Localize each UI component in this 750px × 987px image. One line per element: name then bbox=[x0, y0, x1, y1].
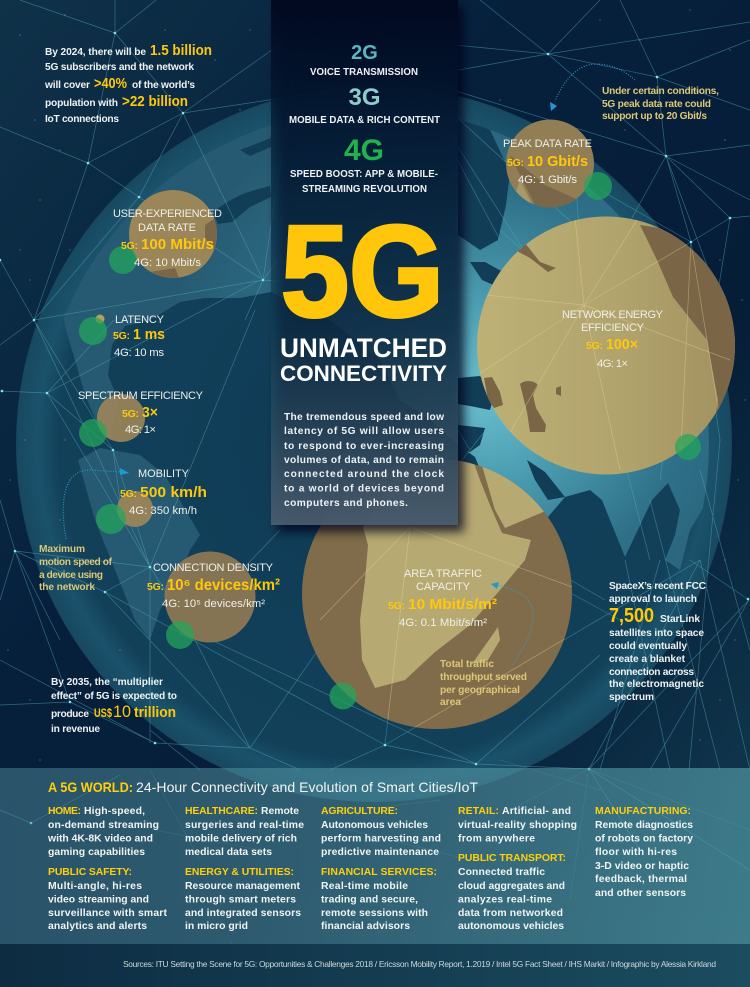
generations timeline: VOICE TRANSMISSION bbox=[310, 67, 418, 78]
callout: 2035 multiplier effect: effect” of 5G is expected to bbox=[51, 691, 177, 702]
column: retail and public transport: from anywhere bbox=[458, 834, 535, 844]
callout: SpaceX StarLink: SpaceX’s recent FCC bbox=[609, 581, 707, 592]
stat: spectrum efficiency: SPECTRUM EFFICIENCY bbox=[78, 390, 204, 402]
column: home and public safety: PUBLIC SAFETY: bbox=[48, 867, 132, 878]
stat: user-experienced data rate: USER-EXPERIENCED bbox=[113, 208, 222, 220]
callout: 2024 subscribers: >40% bbox=[94, 75, 127, 92]
stat: latency: LATENCY bbox=[115, 314, 165, 326]
column: retail and public transport: Connected traffic bbox=[458, 867, 545, 878]
callout: 2024 subscribers: >22 billion bbox=[122, 93, 188, 110]
callout: SpaceX StarLink: connection across bbox=[609, 667, 694, 678]
callout: 2035 multiplier effect bbox=[51, 677, 177, 735]
footer strip bbox=[0, 944, 750, 987]
column: agriculture and financial services: FINANCIAL SERVICES: bbox=[321, 867, 437, 878]
panel heading: A 5G WORLD: bbox=[48, 779, 133, 795]
stat: latency: 4G: 10 ms bbox=[114, 347, 164, 359]
generations timeline: 2G bbox=[351, 42, 378, 64]
arrow: peak data rate note bbox=[550, 64, 635, 111]
stat: network energy efficiency bbox=[562, 309, 664, 370]
column: agriculture and financial services: AGRICULTURE: bbox=[321, 806, 398, 817]
column: healthcare and energy: surgeries and real-time bbox=[185, 820, 304, 831]
intro paragraph: volumes of data, and to remain bbox=[284, 455, 444, 466]
note: area traffic: Total traffic bbox=[440, 659, 494, 670]
stat: area traffic capacity: 10 Mbit/s/m² bbox=[408, 596, 497, 613]
intro paragraph: latency of 5G will allow users bbox=[284, 426, 444, 437]
note: maximum motion speed: Maximum bbox=[39, 544, 85, 555]
stat: area traffic capacity: AREA TRAFFIC bbox=[404, 568, 482, 580]
stat: area traffic capacity bbox=[388, 568, 497, 629]
intro paragraph: to a world of devices beyond bbox=[284, 484, 444, 494]
note: maximum motion speed: motion speed of bbox=[39, 557, 113, 568]
circle: connection density bbox=[164, 552, 256, 642]
intro paragraph: The tremendous speed and low bbox=[284, 412, 444, 423]
column: home and public safety: Multi-angle, hi-res bbox=[48, 881, 142, 892]
generations timeline: 3G bbox=[348, 84, 381, 111]
callout: 2035 multiplier effect: US$ bbox=[94, 706, 112, 720]
column: manufacturing: MANUFACTURING: bbox=[595, 806, 691, 817]
generations timeline: STREAMING REVOLUTION bbox=[302, 184, 427, 195]
column: home and public safety: HOME: bbox=[48, 806, 81, 817]
subtitle bbox=[280, 333, 447, 386]
central panel bbox=[271, 0, 464, 532]
stat: peak data rate: PEAK DATA RATE bbox=[503, 138, 592, 150]
note: peak data rate: Under certain conditions, bbox=[602, 86, 719, 97]
generations timeline: MOBILE DATA & RICH CONTENT bbox=[289, 115, 440, 126]
stat: peak data rate: 10 Gbit/s bbox=[527, 153, 588, 170]
note: area traffic: per geographical bbox=[440, 685, 520, 696]
callout: 2024 subscribers: IoT connections bbox=[45, 114, 119, 125]
stat: latency bbox=[113, 314, 165, 359]
stat: network energy efficiency: 100× bbox=[606, 336, 638, 353]
circle: spectrum efficiency bbox=[97, 394, 145, 442]
stat: area traffic capacity: 5G: bbox=[388, 600, 405, 612]
callout: 2035 multiplier effect: in revenue bbox=[51, 724, 100, 735]
callout: 2024 subscribers: will cover bbox=[44, 80, 90, 91]
column: home and public safety: with 4K-8K video and bbox=[47, 834, 153, 844]
column: retail and public transport: cloud aggregates and bbox=[458, 881, 565, 892]
stat: user-experienced data rate bbox=[113, 208, 222, 269]
stat: area traffic capacity: 4G: 0.1 Mbit/s/m² bbox=[399, 617, 487, 629]
stat: spectrum efficiency bbox=[78, 390, 204, 436]
stat: latency: 5G: bbox=[113, 330, 130, 342]
column: retail and public transport: autonomous vehicles bbox=[458, 921, 564, 932]
note: peak data rate bbox=[602, 86, 719, 122]
callout: 2035 multiplier effect: produce bbox=[51, 709, 89, 720]
stat: area traffic capacity: CAPACITY bbox=[416, 581, 471, 593]
column: agriculture and financial services: trading and secure, bbox=[321, 894, 418, 906]
stat: mobility bbox=[120, 468, 207, 517]
stat: user-experienced data rate: 4G: 10 Mbit/s bbox=[134, 257, 201, 269]
stat: mobility: 500 km/h bbox=[140, 484, 207, 501]
subtitle: CONNECTIVITY bbox=[280, 361, 447, 386]
column: agriculture and financial services: perform harvesting and bbox=[321, 834, 441, 844]
seas and coast detail bbox=[213, 100, 565, 500]
circle: network energy efficiency bbox=[470, 215, 745, 474]
subtitle: UNMATCHED bbox=[280, 333, 447, 363]
column: agriculture and financial services: Autonomous vehicles bbox=[321, 820, 428, 831]
column: home and public safety: on-demand streaming bbox=[48, 820, 159, 831]
stat: connection density: CONNECTION DENSITY bbox=[153, 562, 274, 574]
column: home and public safety: surveillance with smart bbox=[48, 908, 168, 919]
callout: SpaceX StarLink: the electromagnetic bbox=[609, 679, 704, 690]
stat: connection density: 10⁶ devices/km² bbox=[167, 577, 280, 594]
arrow: mobility note bbox=[63, 468, 129, 539]
column: manufacturing: Remote diagnostics bbox=[595, 820, 693, 831]
column: healthcare and energy: mobile delivery of rich bbox=[185, 834, 297, 844]
callout: 2024 subscribers: of the world’s bbox=[132, 80, 195, 91]
stat: peak data rate bbox=[503, 138, 592, 186]
circle: peak data rate bbox=[506, 120, 594, 215]
callout: SpaceX StarLink: 7,500 bbox=[609, 605, 654, 627]
note: maximum motion speed: a device using bbox=[39, 570, 103, 581]
arrow: area traffic note bbox=[491, 582, 533, 665]
4G comparison circles bbox=[79, 172, 701, 710]
note: area traffic: throughput served bbox=[440, 672, 527, 683]
column: manufacturing bbox=[595, 806, 693, 899]
stat: network energy efficiency: NETWORK ENERGY bbox=[562, 309, 664, 321]
column: agriculture and financial services: financial advisors bbox=[321, 921, 410, 932]
stat: mobility: 4G: 350 km/h bbox=[129, 505, 197, 517]
column: manufacturing: feedback, thermal bbox=[595, 874, 687, 885]
column: home and public safety: video streaming and bbox=[48, 894, 149, 906]
column: retail and public transport bbox=[458, 806, 577, 932]
stat: connection density: 5G: bbox=[147, 581, 164, 593]
circle: latency bbox=[96, 314, 104, 324]
column: healthcare and energy: through smart meters bbox=[185, 894, 296, 906]
callout: 2035 multiplier effect: 10 bbox=[113, 702, 131, 721]
callout: SpaceX StarLink: could eventually bbox=[609, 641, 687, 652]
panel heading: 24-Hour Connectivity and Evolution of Smart Cities/IoT bbox=[136, 779, 478, 795]
stat: user-experienced data rate: DATA RATE bbox=[138, 222, 196, 234]
column: agriculture and financial services: predictive maintenance bbox=[321, 847, 439, 858]
column: retail and public transport: data from networked bbox=[458, 908, 563, 919]
circle: user-experienced data rate bbox=[129, 190, 220, 282]
generations timeline: 4G bbox=[344, 134, 384, 167]
column: healthcare and energy: Remote bbox=[261, 806, 299, 817]
stat: mobility: 5G: bbox=[120, 488, 137, 500]
column: healthcare and energy: Resource management bbox=[185, 881, 301, 892]
column: agriculture and financial services bbox=[321, 806, 441, 932]
column: home and public safety: High-speed, bbox=[84, 806, 145, 817]
callout: SpaceX StarLink: StarLink bbox=[660, 614, 700, 625]
column: manufacturing: 3-D video or haptic bbox=[595, 861, 689, 872]
stat: network energy efficiency: EFFICIENCY bbox=[581, 322, 645, 334]
callout: 2024 subscribers: By 2024, there will be bbox=[45, 47, 146, 58]
column: retail and public transport: PUBLIC TRANSPORT: bbox=[458, 853, 566, 864]
column: home and public safety bbox=[47, 806, 168, 932]
stat: connection density: 4G: 10⁵ devices/km² bbox=[162, 598, 265, 610]
column: agriculture and financial services: remote sessions with bbox=[321, 908, 428, 919]
title: 5G: 5G bbox=[281, 198, 444, 344]
callout: 2024 subscribers: population with bbox=[45, 98, 118, 109]
callout: 2035 multiplier effect: trillion bbox=[134, 704, 176, 721]
callout: 2024 subscribers: 1.5 billion bbox=[150, 42, 212, 59]
callout: SpaceX StarLink: satellites into space bbox=[609, 628, 704, 639]
circle: area traffic capacity bbox=[302, 460, 572, 729]
stat: connection density bbox=[147, 562, 280, 610]
stat: network energy efficiency: 4G: 1× bbox=[597, 358, 628, 370]
column: retail and public transport: Artificial- and bbox=[502, 806, 571, 817]
column: home and public safety: analytics and alerts bbox=[48, 921, 147, 932]
column: agriculture and financial services: Real-time mobile bbox=[321, 881, 408, 892]
note: area traffic bbox=[440, 659, 527, 708]
callout: SpaceX StarLink bbox=[609, 581, 707, 703]
callout: SpaceX StarLink: spectrum bbox=[609, 692, 654, 703]
column: healthcare and energy: ENERGY & UTILITIES: bbox=[185, 867, 294, 878]
column: retail and public transport: RETAIL: bbox=[458, 806, 499, 817]
column: retail and public transport: analyzes real-time bbox=[458, 894, 552, 906]
column: manufacturing: and other sensors bbox=[595, 888, 686, 899]
column: manufacturing: floor with hi-res bbox=[595, 847, 677, 858]
stat: mobility: MOBILITY bbox=[138, 468, 190, 480]
circle: mobility bbox=[117, 491, 153, 527]
note: maximum motion speed: the network bbox=[39, 582, 95, 593]
stat: peak data rate: 5G: bbox=[507, 157, 524, 169]
note: peak data rate: 5G peak data rate could bbox=[602, 99, 711, 110]
column: healthcare and energy: medical data sets bbox=[185, 847, 272, 858]
column: healthcare and energy: HEALTHCARE: bbox=[185, 806, 258, 817]
sources: Sources: ITU Setting the Scene for 5G: Opportunities & Challenges 2018 / Ericsson Mobility Report, 1.2019 / Intel 5G Fact Sheet / IHS Markit / Infographic by Alessia Kirkland bbox=[123, 959, 716, 969]
stat: peak data rate: 4G: 1 Gbit/s bbox=[518, 174, 577, 186]
note: maximum motion speed bbox=[39, 544, 113, 593]
stat: spectrum efficiency: 4G: 1× bbox=[125, 424, 156, 436]
stat: spectrum efficiency: 3× bbox=[142, 404, 158, 421]
intro paragraph: computers and phones. bbox=[284, 498, 408, 509]
intro paragraph: to respond to ever-increasing bbox=[284, 441, 444, 452]
stat: user-experienced data rate: 100 Mbit/s bbox=[141, 236, 214, 253]
stat: network energy efficiency: 5G: bbox=[586, 340, 603, 352]
column: home and public safety: gaming capabilities bbox=[48, 847, 145, 858]
stat: user-experienced data rate: 5G: bbox=[121, 240, 138, 252]
column: healthcare and energy: and integrated sensors bbox=[185, 908, 301, 919]
column: healthcare and energy: in micro grid bbox=[185, 921, 248, 932]
callout: SpaceX StarLink: create a blanket bbox=[609, 654, 686, 665]
landmasses bbox=[64, 126, 709, 640]
column: manufacturing: of robots on factory bbox=[595, 834, 693, 844]
column: healthcare and energy bbox=[185, 806, 304, 932]
callout: 2024 subscribers bbox=[44, 42, 212, 125]
intro paragraph bbox=[284, 412, 444, 509]
callout: 2035 multiplier effect: By 2035, the “multiplier bbox=[51, 677, 163, 688]
stat: latency: 1 ms bbox=[133, 326, 165, 343]
callout: SpaceX StarLink: approval to launch bbox=[609, 594, 697, 605]
generations timeline bbox=[289, 42, 440, 195]
generations timeline: SPEED BOOST: APP & MOBILE- bbox=[290, 169, 438, 180]
note: area traffic: area bbox=[440, 697, 461, 708]
intro paragraph: connected around the clock bbox=[284, 469, 444, 480]
callout: 2024 subscribers: 5G subscribers and the network bbox=[45, 62, 194, 73]
column: retail and public transport: virtual-reality shopping bbox=[458, 820, 577, 831]
panel: a 5G world bbox=[0, 768, 750, 944]
stat: spectrum efficiency: 5G: bbox=[122, 408, 139, 420]
note: peak data rate: support up to 20 Gbit/s bbox=[602, 111, 707, 122]
